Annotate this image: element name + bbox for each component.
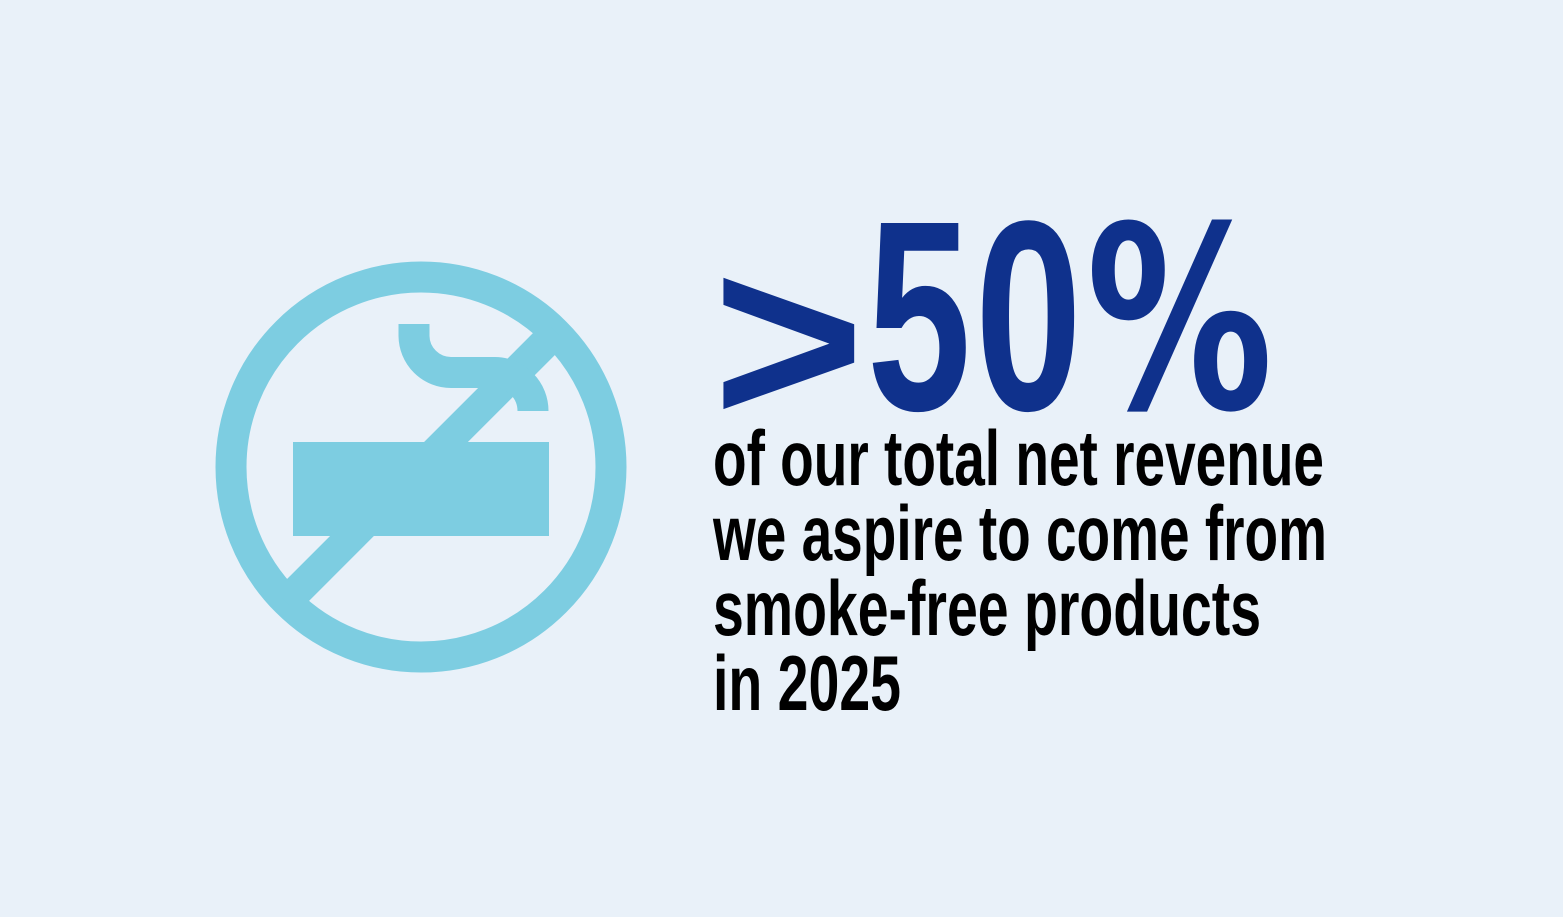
greater-than sign: > (712, 205, 865, 476)
digit five: 5 (867, 165, 971, 468)
description text (712, 414, 1327, 727)
icon: cigarette body (293, 442, 549, 536)
digit zero: 0 (975, 164, 1082, 467)
line 3: smoke-free products (713, 564, 1261, 652)
icon: prohibition ring (231, 277, 611, 657)
icon: no smoking (231, 277, 611, 657)
line 1: of our total net revenue (713, 414, 1324, 502)
icon: smoke curl (414, 324, 533, 411)
percent sign: % (1086, 172, 1273, 468)
headline figure (712, 164, 1273, 476)
icon: prohibition slash (286, 332, 556, 602)
line 4: in 2025 (713, 639, 901, 727)
line 2: we aspire to come from (712, 489, 1327, 577)
